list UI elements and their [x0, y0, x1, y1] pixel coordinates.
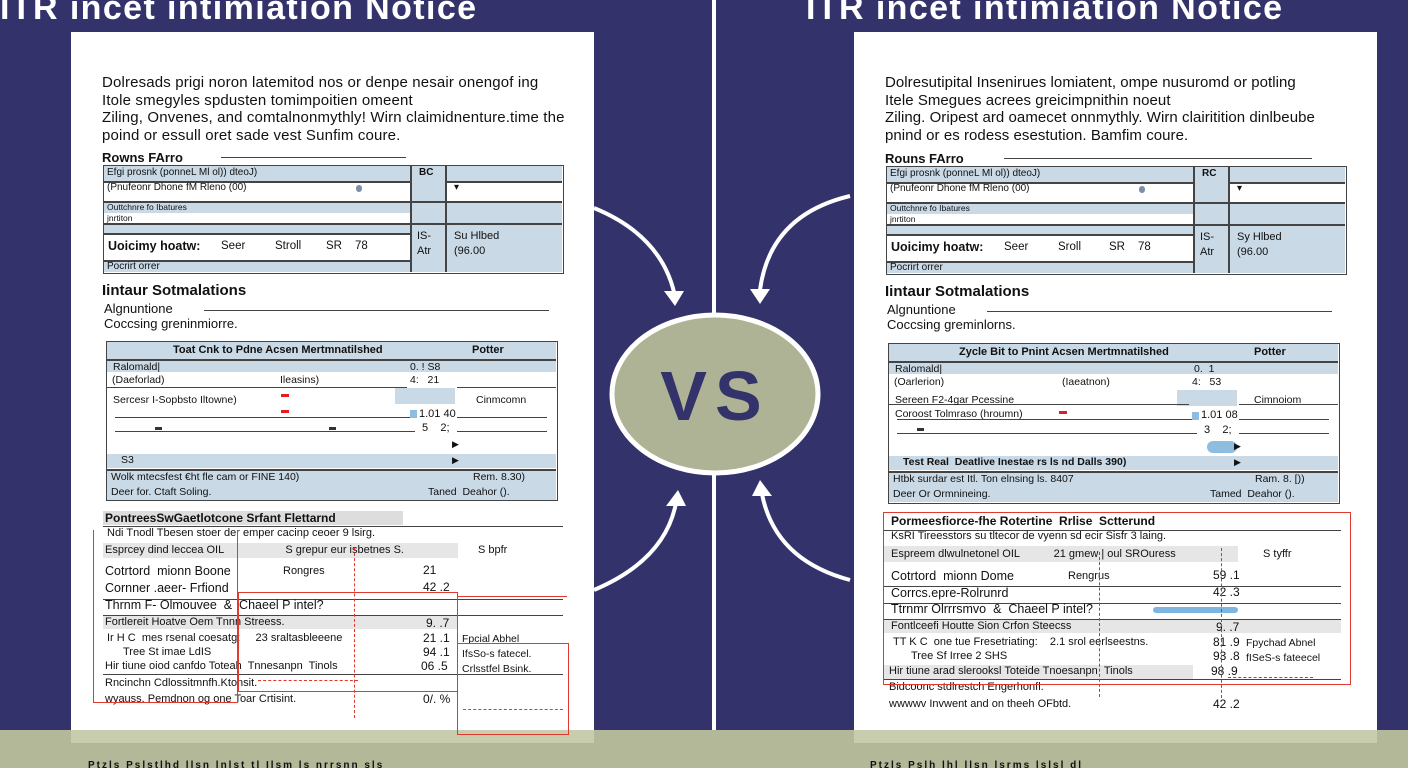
- table 2: Htbk surdar est Itl. Ton elnsing ls. 8407: [893, 473, 1074, 485]
- section 3: final figures: Esprcey dind leccea OIL S grepur eur isbetnes S.: [105, 544, 404, 556]
- section 3: final figures: Pormeesfiorce-fhe Rotertine Rrlise Sctterund: [891, 514, 1155, 528]
- section 3: final figures: 21 .1: [423, 631, 450, 645]
- section 3: final figures: Corrcs.epre-Rolrunrd: [891, 586, 1008, 600]
- table 2: Coroost Tolmraso (hroumn): [895, 408, 1023, 420]
- section 3: final figures: Fpychad Abnel: [1246, 637, 1315, 649]
- subheading text: Coccsing greminlorns.: [887, 317, 1016, 332]
- center divider: [712, 0, 716, 730]
- table 2: 4: 21: [410, 374, 439, 386]
- table 1: Uoicimy hoatw:: [108, 239, 200, 253]
- intro text: Dolresads prigi noron latemitod nos or denpe nesair onengof ing: [102, 74, 538, 91]
- intro text: Dolresutipital Insenirues lomiatent, ompe nusuromd or potling: [885, 74, 1296, 91]
- section heading: Rowns FArro: [102, 150, 183, 165]
- section 3: final figures: KsRI Tireesstors su tltecor de vyenn sd ecir Sisfr 3 laing.: [891, 530, 1166, 542]
- table 1: (96.00: [454, 245, 485, 257]
- section 3: final figures: 0/. %: [423, 692, 450, 706]
- intro text: Ziling. Oripest ard oamecet onnmythly. Wirn clairitition dinlbeube: [885, 109, 1315, 126]
- red highlight frame: [883, 512, 1351, 685]
- table 1: Stroll: [275, 240, 301, 252]
- section 3: final figures: Fontlceefi Houtte Sion Crfon Steecss: [891, 620, 1071, 632]
- table 1: SR: [326, 240, 342, 252]
- section 3: final figures: [884, 514, 1341, 711]
- section 3: final figures: 06 .5: [421, 659, 448, 673]
- section 3: final figures: Cornner .aeer- Frfiond: [105, 581, 229, 595]
- intro text: poind or essull oret sade vest Sunfim coure.: [102, 126, 400, 144]
- table 1: SR: [1109, 241, 1125, 253]
- table 1: Efgi prosnk (ponneL Ml ol)) dteoJ): [890, 168, 1040, 179]
- table 1: BC: [419, 167, 433, 178]
- table 2: ▶: [1234, 441, 1241, 451]
- subheading text: Algnuntione: [104, 301, 173, 316]
- table 1: Atr: [417, 245, 431, 257]
- table 1: Uoicimy hoatw:: [891, 240, 983, 254]
- table 2: Ralomald|: [113, 361, 160, 373]
- panel: right document: [854, 32, 1377, 730]
- table 2: 3 2;: [1204, 424, 1232, 436]
- intro text: Ziling, Onvenes, and comtalnonmythly! Wirn claimidnenture.time the: [102, 109, 565, 126]
- table 1: [103, 165, 564, 274]
- intro text: pnind or es rodess esestution. Bamfim coure.: [885, 126, 1188, 144]
- table 2: (Iaeatnon): [1062, 376, 1110, 388]
- bottom band: [0, 730, 1408, 768]
- table 2: ▶: [452, 439, 459, 449]
- table 2: 0. 1: [1194, 363, 1214, 375]
- table 2: 5 2;: [422, 422, 450, 434]
- table 1: Atr: [1200, 246, 1214, 258]
- section heading: simulations: Iintaur Sotmalations: [102, 282, 246, 299]
- table 2: Cinmcomn: [476, 394, 526, 406]
- section 3: final figures: Fpcial Abhel: [462, 633, 519, 645]
- table 2: 4: 53: [1192, 376, 1221, 388]
- section 3: final figures: Cotrtord mionn Boone: [105, 564, 231, 578]
- table 2: Toat Cnk to Pdne Acsen Mertmnatilshed: [173, 344, 383, 356]
- section 3: final figures: Ir H C mes rsenal coesatg: 23 sraltasbleeene: [107, 632, 342, 644]
- section 3: final figures: Espreem dlwulnetonel OIL 21 gmew | oul SROuress: [891, 548, 1176, 560]
- section 3: final figures: Thrnm F- Olmouvee & Chaeel P intel?: [105, 598, 324, 612]
- table 2: Test Real Deatlive Inestae rs ls nd Dalls 390): [903, 456, 1126, 468]
- table 1: IS-: [1200, 231, 1214, 243]
- intro text: Itole smegyles spdusten tomimpoitien omeent: [102, 92, 413, 108]
- table 1: Outtchnre fo Ibatures: [890, 203, 970, 213]
- subheading text: Algnuntione: [887, 302, 956, 317]
- table 1: Pocrirt orrer: [890, 262, 943, 273]
- section 3: final figures: 98 .9: [1211, 664, 1238, 678]
- section 3: final figures: 42 .2: [1213, 697, 1240, 711]
- red annotation boxes: [93, 530, 238, 703]
- section 3: final figures: S bpfr: [478, 544, 507, 556]
- table 2: 1.01 08: [1201, 409, 1238, 421]
- table 2: Tamed Deahor ().: [1210, 488, 1295, 500]
- section 3: final figures: IfsSo-s fatecel.: [462, 648, 531, 660]
- table 2: [888, 343, 1340, 504]
- table 1: Sroll: [1058, 241, 1081, 253]
- table 1: 78: [355, 240, 368, 252]
- table 2: Zycle Bit to Pnint Acsen Mertmnatilshed: [959, 346, 1169, 358]
- table 2: Deer Or Ormnineing.: [893, 488, 990, 500]
- section 3: final figures: 21: [423, 563, 436, 577]
- intro text: [885, 74, 1315, 144]
- table 1: ▾: [1237, 183, 1242, 194]
- arrow: top right: [750, 196, 850, 304]
- section 3: final figures: Fortlereit Hoatve Oem Tnnn Streess.: [105, 616, 285, 628]
- table 1: RC: [1202, 168, 1216, 179]
- section 3: final figures: 93 .8: [1213, 649, 1240, 663]
- table 2: (Daeforlad): [112, 374, 165, 386]
- table 2: S3: [121, 454, 134, 466]
- section 3: final figures: Ttrnmr Olrrrsmvo & Chaeel P intel?: [891, 602, 1093, 616]
- table 1: ▾: [454, 182, 459, 193]
- arrow: top left: [594, 208, 684, 306]
- table 2: Potter: [472, 344, 504, 356]
- panel: left document: [71, 32, 594, 730]
- section 3: final figures: 59 .1: [1213, 568, 1240, 582]
- table 1: jnrtiton: [890, 214, 916, 224]
- section 3: final figures: Hir tiune arad slerooksl Toteide Tnoesanpn Tinols: [889, 665, 1133, 677]
- table 1: Pocrirt orrer: [107, 261, 160, 272]
- table 1: (96.00: [1237, 246, 1268, 258]
- VS badge: [612, 315, 818, 473]
- section 3: final figures: 42 .2: [423, 580, 450, 594]
- section 3: final figures: wwwwv Invwent and on theeh OFbtd.: [889, 698, 1071, 710]
- section 3: final figures: 9. .7: [1216, 620, 1239, 634]
- intro text: [102, 74, 565, 144]
- table 1: (Pnufeonr Dhone fM Rleno (00): [107, 182, 247, 193]
- table 2: ▶: [1234, 457, 1241, 467]
- subheading text: [887, 302, 1016, 332]
- section 3: final figures: Crlsstfel Bsink.: [462, 663, 531, 675]
- table 2: Deer for. Ctaft Soling.: [111, 486, 211, 498]
- section 3: final figures: Tree St imae LdIS: [123, 646, 211, 658]
- section 3: final figures: S tyffr: [1263, 548, 1292, 560]
- subheading text: [104, 301, 238, 331]
- table 1: [886, 166, 1347, 275]
- section 3: final figures: Tree Sf Irree 2 SHS: [911, 650, 1007, 662]
- table 1: IS-: [417, 230, 431, 242]
- table 2: Potter: [1254, 346, 1286, 358]
- table 2: ▶: [452, 455, 459, 465]
- subheading text: Coccsing greninmiorre.: [104, 316, 238, 331]
- section 3: final figures: Hir tiune oiod canfdo Toteah Tnnesanpn Tinols: [105, 660, 338, 672]
- section 3: final figures: TT K C one tue Fresetriating: 2.1 srol eerlseestns.: [893, 636, 1148, 648]
- table 2: Ram. 8. [)): [1255, 473, 1305, 485]
- section 3: final figures: PontreesSwGaetlotcone Srfant Flettarnd: [105, 511, 336, 525]
- table 2: Ileasins): [280, 374, 319, 386]
- table 2: Taned Deahor ().: [428, 486, 510, 498]
- table 2: Ralomald|: [895, 363, 942, 375]
- arrow: bottom right: [752, 480, 850, 580]
- arrow: bottom left: [594, 490, 686, 590]
- section 3: final figures: [93, 511, 569, 735]
- table 2: Wolk mtecsfest €ht fle cam or FINE 140): [111, 471, 299, 483]
- table 1: Outtchnre fo Ibatures: [107, 202, 187, 212]
- table 2: 0. ! S8: [410, 361, 440, 373]
- section 3: final figures: Rengrus: [1068, 570, 1110, 582]
- section 3: final figures: 81 .9: [1213, 635, 1240, 649]
- section heading: simulations: Iintaur Sotmalations: [885, 283, 1029, 300]
- section 3: final figures: Cotrtord mionn Dome: [891, 569, 1014, 583]
- section 3: final figures: Rncinchn Cdlossitmnfh.Ktonsit.: [105, 677, 257, 689]
- section 3: final figures: 94 .1: [423, 645, 450, 659]
- table 2: (Oarlerion): [894, 376, 944, 388]
- table 2: Cimnoiom: [1254, 394, 1301, 406]
- table 2: Rem. 8.30): [473, 471, 525, 483]
- table 1: Efgi prosnk (ponneL Ml ol)) dteoJ): [107, 167, 257, 178]
- table 2: 1.01 40: [419, 408, 456, 420]
- table 1: Seer: [1004, 241, 1028, 253]
- section 3: final figures: Ndi Tnodl Tbesen stoer der emper cacinp ceoer 9 lsirg.: [107, 527, 375, 539]
- intro text: Itele Smegues acrees greicimpnithin noeut: [885, 92, 1171, 108]
- table 1: jnrtiton: [107, 213, 133, 223]
- VS badge: VS: [660, 357, 770, 435]
- section 3: final figures: wyauss. Pemdnon og one Toar Crtisint.: [105, 693, 296, 705]
- section 3: final figures: Rongres: [283, 565, 325, 577]
- table 1: Seer: [221, 240, 245, 252]
- table 2: [106, 341, 558, 501]
- table 1: Su Hlbed: [454, 230, 499, 242]
- section 3: final figures: fISeS-s fateecel: [1246, 652, 1320, 664]
- section heading: Rouns FArro: [885, 151, 964, 166]
- table 1: (Pnufeonr Dhone fM Rleno (00): [890, 183, 1030, 194]
- table 1: Sy Hlbed: [1237, 231, 1282, 243]
- section 3: final figures: 42 .3: [1213, 585, 1240, 599]
- section 3: final figures: 9. .7: [426, 616, 449, 630]
- table 2: Sereen F2-4gar Pcessine: [895, 394, 1014, 406]
- table 2: Sercesr I-Sopbsto Iltowne): [113, 394, 237, 406]
- section 3: final figures: Bidcoonc stdlrestch Engerhonfl.: [889, 681, 1044, 693]
- table 1: 78: [1138, 241, 1151, 253]
